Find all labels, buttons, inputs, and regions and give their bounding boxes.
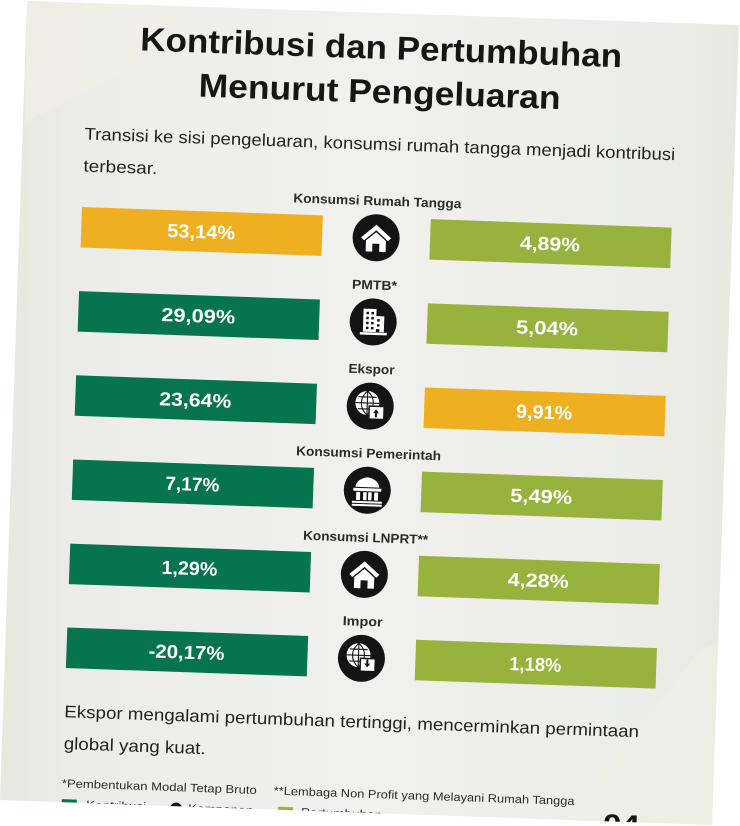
bar: pertumbuhan 4,28%	[418, 556, 660, 605]
bar: pertumbuhan 1,18%	[415, 640, 657, 689]
row: Impor	[66, 616, 657, 689]
bar: kontribusi 29,09%	[78, 291, 320, 340]
intro text: Transisi ke sisi pengeluaran, konsumsi rumah tangga menjadi kontribusi	[84, 125, 676, 164]
intro text	[84, 128, 674, 174]
row: Konsumsi Rumah Tangga: Konsumsi Rumah Tangga	[293, 190, 462, 211]
row: Konsumsi LNPRT: 1,29%	[161, 558, 218, 581]
row: Impor: 1,18%	[509, 654, 562, 677]
row: Konsumsi Rumah Tangga: 53,14%	[167, 221, 236, 244]
bar: kontribusi -20,17%	[66, 628, 308, 676]
row: Ekspor: 9,91%	[516, 402, 573, 425]
closing text: Ekspor mengalami pertumbuhan tertinggi, mencerminkan permintaan	[64, 702, 639, 741]
row: Konsumsi Pemerintah: 5,49%	[510, 486, 573, 509]
footnotes: *Pembentukan Modal Tetap Bruto	[62, 778, 257, 797]
legend: Komponen	[188, 803, 253, 817]
closing text	[64, 705, 638, 756]
bar: kontribusi 1,29%	[69, 544, 311, 592]
row: Konsumsi Rumah Tangga: 4,89%	[520, 233, 580, 256]
row: Konsumsi Pemerintah: Konsumsi Pemerintah	[296, 443, 441, 463]
icon: house	[352, 213, 400, 262]
row: Ekspor	[74, 364, 666, 436]
icon: globe with inbound box	[337, 634, 386, 683]
title: Kontribusi dan Pertumbuhan	[140, 20, 623, 74]
row: Impor: -20,17%	[148, 641, 225, 665]
footnotes: **Lembaga Non Profit yang Melayani Rumah Tangga	[274, 786, 575, 808]
row: Ekspor: Ekspor	[348, 361, 395, 377]
row: Ekspor: 23,64%	[159, 389, 232, 413]
bar: pertumbuhan 9,91%	[423, 387, 666, 436]
intro text: terbesar.	[83, 157, 158, 178]
closing text: global yang kuat.	[63, 734, 206, 758]
row: PMTB: 29,09%	[161, 305, 236, 329]
row: PMTB: PMTB*	[352, 277, 398, 293]
row: Konsumsi Rumah Tangga	[80, 194, 672, 268]
row: Impor: Impor	[342, 613, 383, 630]
footnotes	[62, 778, 575, 808]
row: Konsumsi LNPRT	[68, 530, 660, 605]
paper corner highlights	[62, 28, 674, 822]
bar: pertumbuhan 4,89%	[429, 219, 672, 268]
bar: pertumbuhan 5,04%	[426, 303, 669, 352]
row: Konsumsi Pemerintah	[72, 446, 663, 520]
legend	[62, 799, 381, 814]
title: Menurut Pengeluaran	[198, 67, 561, 116]
row: PMTB: 5,04%	[516, 317, 578, 341]
bar: pertumbuhan 5,49%	[421, 472, 663, 521]
icon: globe with box	[346, 382, 395, 430]
row: Konsumsi Pemerintah: 7,17%	[165, 474, 220, 497]
icon: government dome	[343, 466, 392, 515]
row: Konsumsi LNPRT: Konsumsi LNPRT**	[303, 528, 429, 547]
bar: kontribusi 7,17%	[72, 459, 314, 508]
bar: kontribusi 23,64%	[75, 375, 317, 424]
row: PMTB	[78, 280, 669, 352]
title	[142, 28, 620, 112]
icon: house	[340, 550, 389, 599]
row: Konsumsi LNPRT: 4,28%	[507, 570, 569, 593]
legend: Pertumbuhan	[301, 807, 382, 822]
legend: Kontribusi	[86, 800, 146, 814]
bar: kontribusi 53,14%	[81, 207, 323, 256]
icon: buildings	[349, 298, 397, 346]
